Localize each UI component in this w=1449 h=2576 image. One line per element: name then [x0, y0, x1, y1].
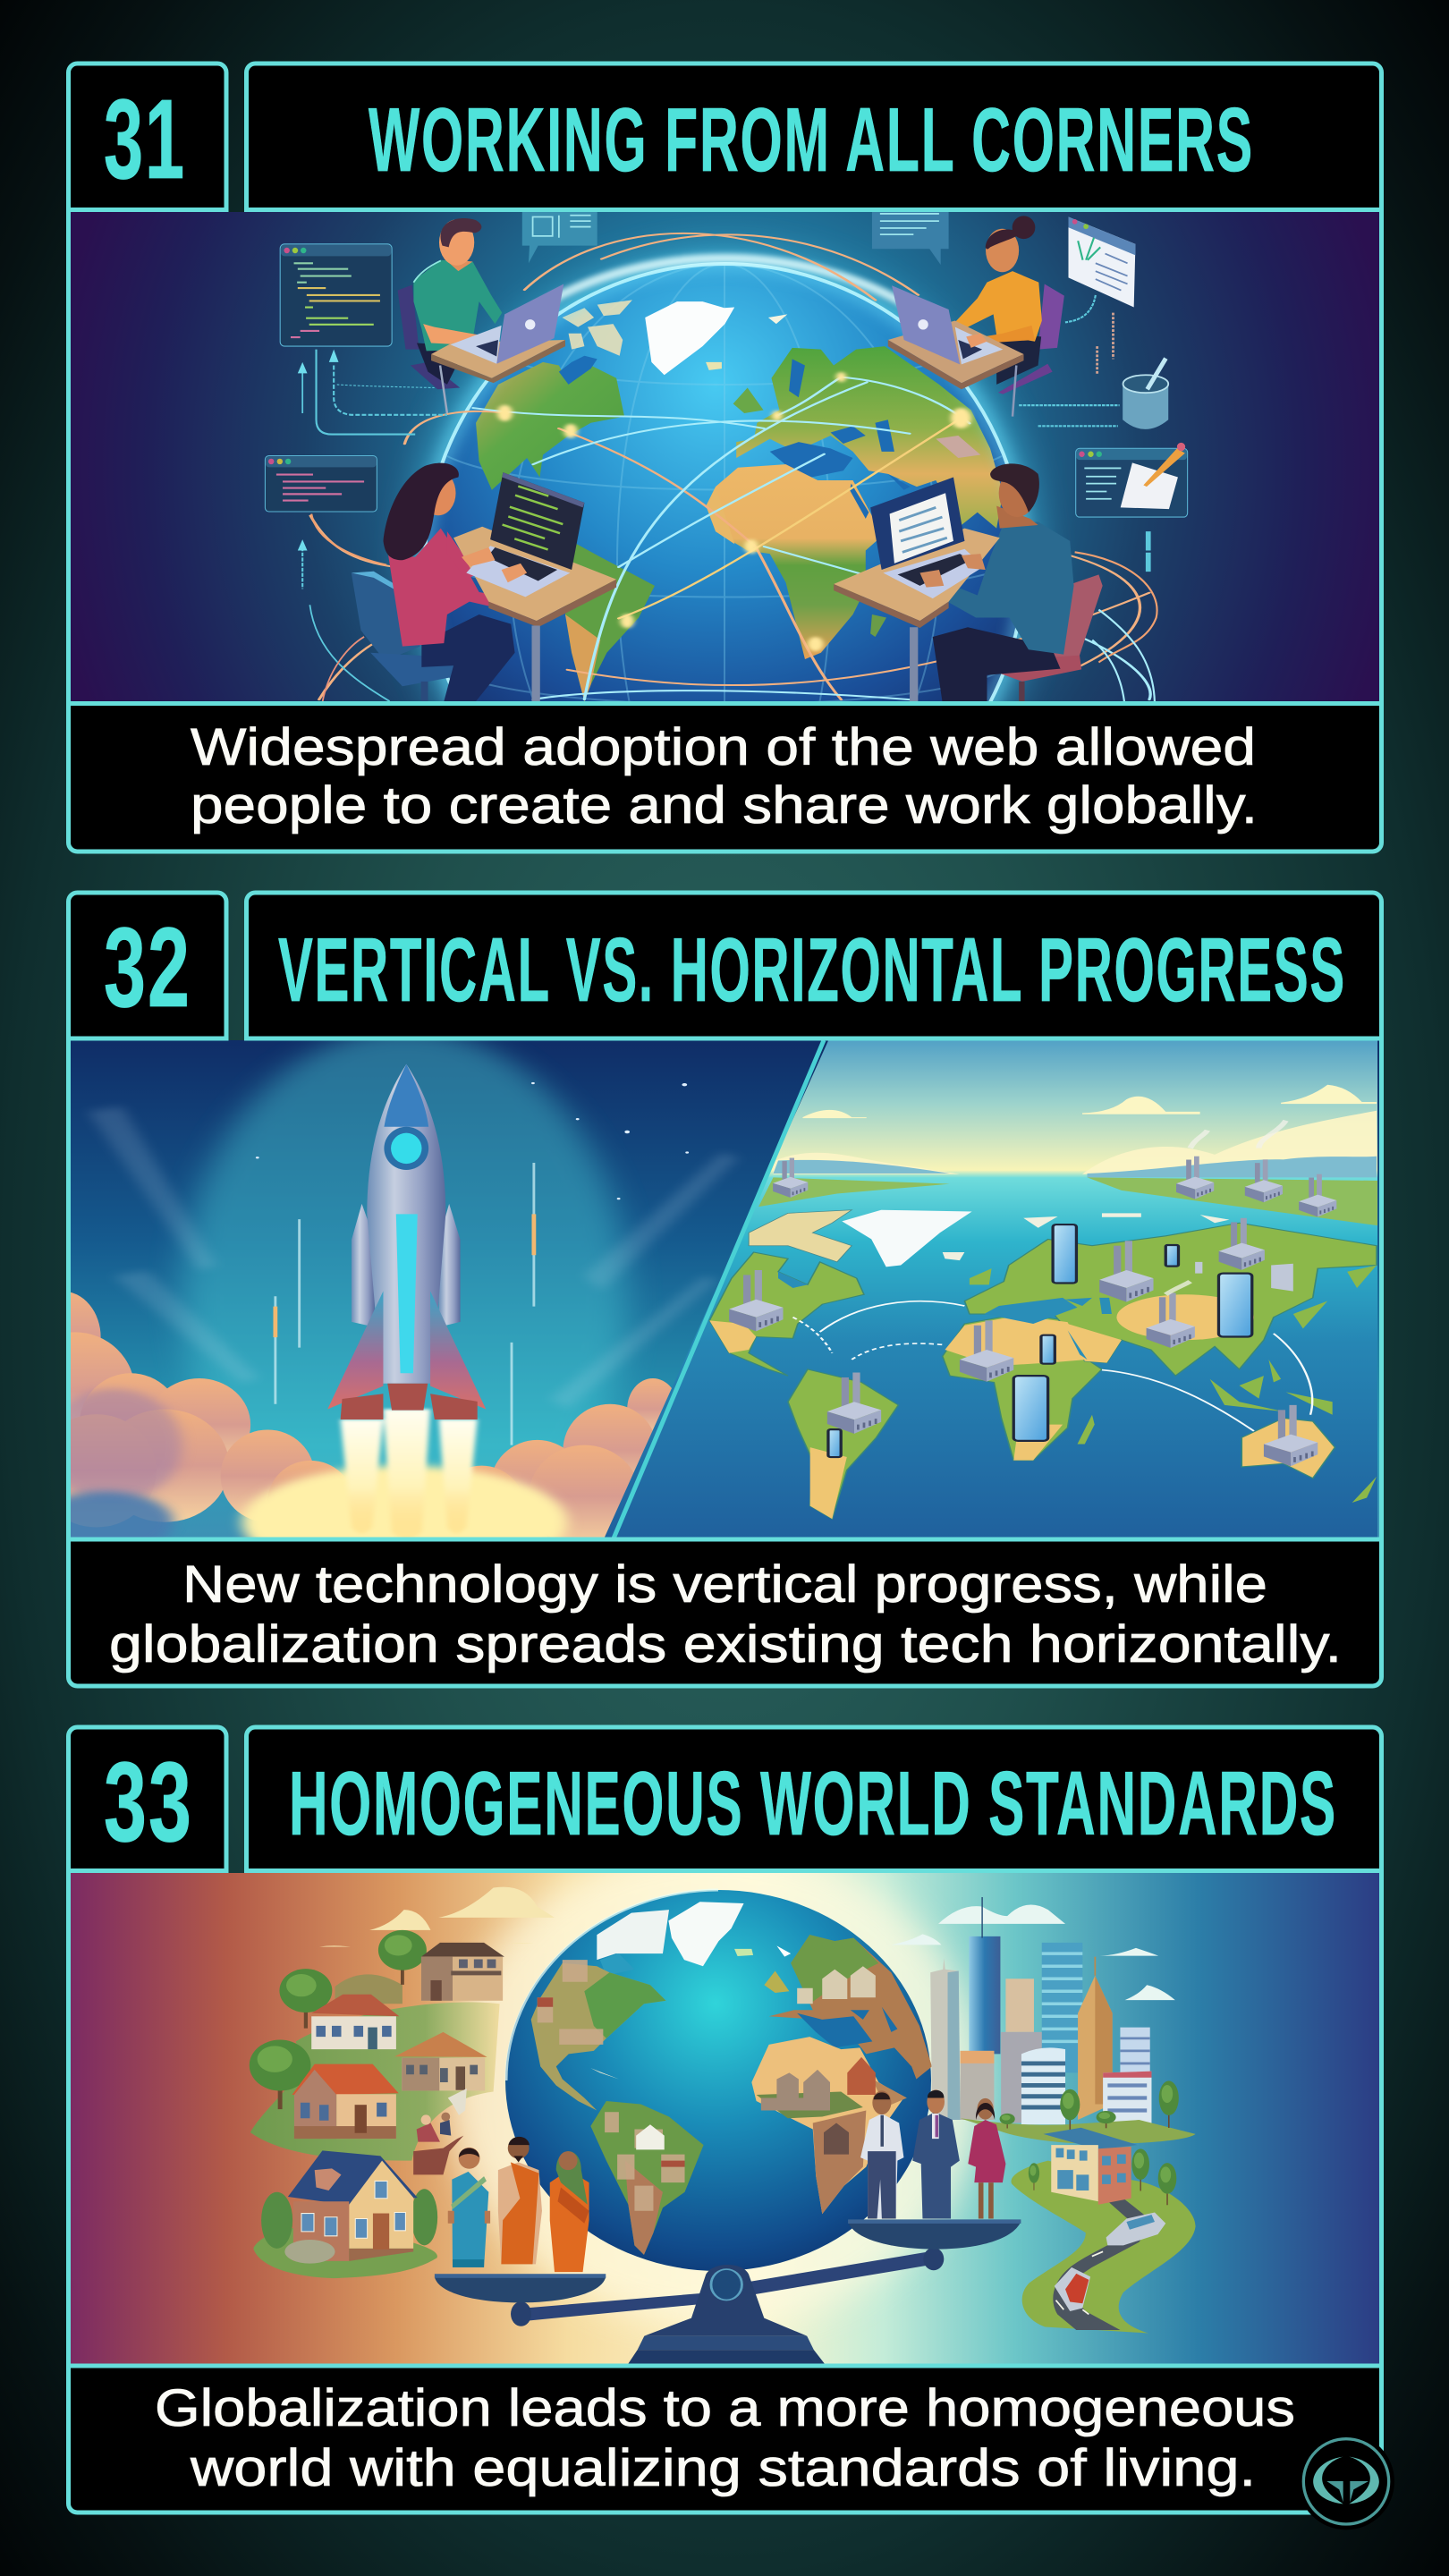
land strips at the horizon — [758, 1177, 950, 1207]
person: woman in yellow at laptop — [888, 216, 1064, 417]
north america — [709, 1252, 864, 1376]
illustration: globe balanced between villages and cities — [69, 1843, 1382, 2365]
winding green island and road — [1011, 2161, 1196, 2334]
number box 32 — [68, 893, 226, 1038]
caption box 33 — [68, 2366, 1381, 2512]
factories — [729, 1157, 1336, 1466]
caption box 32 — [68, 1539, 1381, 1686]
number box 32: 32 — [104, 904, 191, 1030]
title box 31 — [247, 64, 1381, 209]
person: man in blue at laptop — [834, 463, 1103, 702]
number box 31 — [68, 64, 226, 209]
business people on the scale — [860, 2089, 1005, 2219]
house blue roof — [284, 2150, 418, 2264]
caption box 32: New technology is vertical progress, while — [182, 1555, 1267, 1614]
south america — [788, 1369, 898, 1519]
title box 32 — [247, 893, 1381, 1038]
panel 32: vertical vs horizontal progress — [15, 893, 1411, 1686]
rider and animal — [413, 2089, 467, 2174]
africa — [943, 1314, 1102, 1461]
caption box 31: Widespread adoption of the web allowed — [191, 718, 1256, 776]
caption box 33: Globalization leads to a more homogeneous — [155, 2379, 1295, 2437]
image frame — [68, 212, 1381, 701]
globe with continents — [401, 233, 1055, 701]
house far — [421, 1943, 504, 2001]
person: woman in pink at laptop — [352, 463, 616, 702]
villagers on the scale — [448, 2137, 589, 2272]
village houses on the left — [250, 1887, 589, 2278]
world map half — [577, 1038, 1411, 1545]
person: man in green at laptop — [398, 218, 565, 413]
image frame — [68, 1040, 1381, 1538]
continents in left zoom space — [476, 300, 734, 701]
rocket body — [327, 1064, 486, 1419]
title box 33 — [247, 1727, 1381, 1871]
rocket flames — [341, 1409, 478, 1538]
hills — [250, 2003, 500, 2161]
panel 31: working from all corners — [68, 64, 1382, 878]
australia — [1241, 1418, 1335, 1479]
connection arcs — [792, 1301, 1312, 1431]
house red roof — [311, 1995, 399, 2049]
skyline, businesspeople and road on the right — [860, 1897, 1196, 2334]
caption box 31 — [68, 703, 1381, 852]
caption box 33: world with equalizing standards of living. — [190, 2439, 1256, 2497]
house brown roof — [394, 2032, 487, 2090]
right floating windows, cup and connectors — [872, 206, 1188, 701]
logo badge — [1298, 2433, 1394, 2529]
phones — [828, 1224, 1252, 1457]
image frame — [68, 1873, 1381, 2366]
exhaust clouds — [71, 1292, 672, 1537]
number box 33: 33 — [104, 1739, 193, 1865]
caption box 31: people to create and share work globally. — [191, 776, 1258, 835]
illustration: rocket and world map — [71, 1040, 1379, 1537]
network arcs and glowing nodes — [310, 233, 1150, 699]
balance scale — [435, 2219, 1021, 2365]
number box 31: 31 — [104, 76, 186, 202]
left floating windows and connector lines — [265, 206, 597, 701]
globe — [505, 1890, 932, 2271]
eurasia — [964, 1223, 1377, 1376]
rocket launch half — [71, 1040, 1379, 1537]
number box 33 — [68, 1727, 226, 1871]
cars — [1106, 2212, 1165, 2245]
mid-rise building — [1043, 2128, 1138, 2149]
diagonal divider — [614, 1040, 824, 1538]
caption box 32: globalization spreads existing tech horizontally. — [109, 1615, 1342, 1674]
panel 33: homogeneous world standards — [68, 1727, 1382, 2512]
illustration: remote workers around a globe — [71, 212, 1379, 701]
house orange roof — [292, 2064, 399, 2139]
